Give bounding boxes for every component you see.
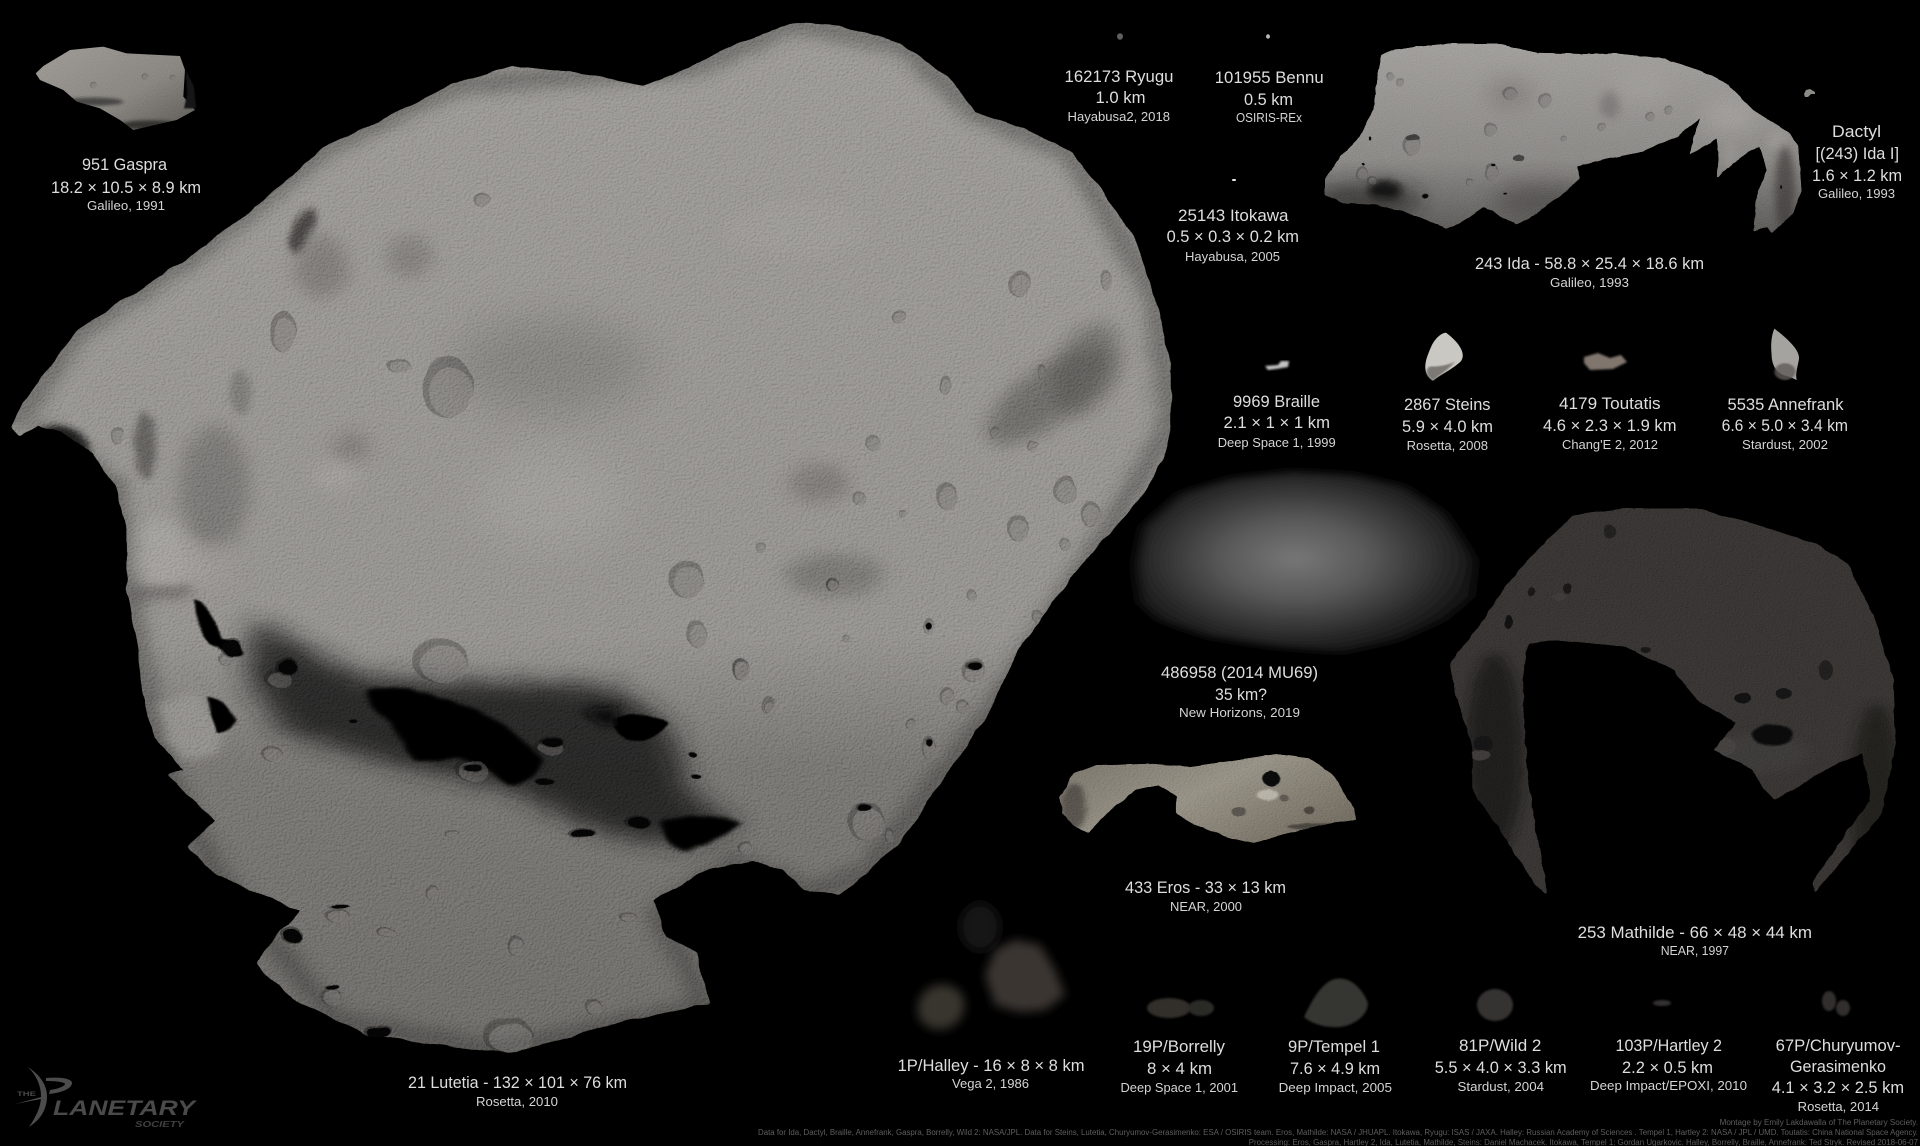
logo: The Planetary Society: THE	[17, 1092, 36, 1098]
caption: 9969 Braille: 2.1 × 1 × 1 km	[1224, 413, 1330, 432]
credits: Data for Ida, Dactyl, Braille, Annefrank, Gaspra, Borrelly, Wild 2: NASA/JPL. Data for Steins, Lutetia, Churyumov-Gerasimenko: ESA / OSIRIS team. Eros, Mathilde: NASA / JHUAPL. Itokawa, Ryugu: ISAS / JAXA. Halley: Russian Academy of Sciences . Tempel 1, Hartley 2: NASA / JPL / UMD. Toutatis: China National Space Agency.	[758, 1128, 1918, 1137]
caption: 4179 Toutatis: Chang'E 2, 2012	[1562, 437, 1658, 452]
caption: 101955 Bennu	[1215, 68, 1324, 125]
caption: 433 Eros: NEAR, 2000	[1170, 899, 1242, 914]
caption: Dactyl: [(243) Ida I]	[1816, 144, 1899, 163]
caption: 5535 Annefrank	[1722, 395, 1848, 452]
caption: 162173 Ryugu	[1064, 67, 1174, 124]
asteroid: 4179 Toutatis	[1584, 353, 1627, 370]
caption: 101955 Bennu: 0.5 km	[1244, 90, 1293, 109]
logo: The Planetary Society: LANETARY	[53, 1097, 198, 1120]
caption: 19P/Borrelly: 8 × 4 km	[1147, 1059, 1212, 1078]
lower craters	[218, 561, 893, 1053]
caption: 951 Gaspra	[51, 155, 201, 213]
upper crater field	[112, 193, 1111, 758]
asteroid: 486958 (2014 MU69)	[1137, 472, 1475, 653]
caption: 25143 Itokawa: 0.5 × 0.3 × 0.2 km	[1167, 227, 1299, 246]
caption: 101955 Bennu: 101955 Bennu	[1215, 68, 1324, 87]
caption: 162173 Ryugu: 1.0 km	[1096, 88, 1146, 107]
caption: 67P/Churyumov-Gerasimenko: 4.1 × 3.2 × 2.5 km	[1772, 1078, 1904, 1097]
caption: Dactyl: Galileo, 1993	[1818, 186, 1895, 201]
caption: 2867 Steins	[1402, 395, 1493, 453]
caption: 2867 Steins: Rosetta, 2008	[1407, 438, 1488, 453]
caption: 9969 Braille: Deep Space 1, 1999	[1218, 435, 1336, 450]
caption: 19P/Borrelly	[1120, 1037, 1238, 1095]
caption: 5535 Annefrank: 6.6 × 5.0 × 3.4 km	[1722, 416, 1848, 435]
caption: 21 Lutetia: 21 Lutetia - 132 × 101 × 76 km	[408, 1073, 627, 1092]
caption: 253 Mathilde: 253 Mathilde - 66 × 48 × 44 km	[1578, 923, 1812, 942]
caption: 1P/Halley	[898, 1056, 1085, 1091]
asteroid: 243 Ida	[1324, 43, 1802, 233]
caption: 486958 (2014 MU69): 486958 (2014 MU69)	[1161, 663, 1318, 682]
caption: 9P/Tempel 1: 9P/Tempel 1	[1288, 1037, 1380, 1056]
asteroid: 433 Eros	[1059, 754, 1356, 843]
shadow band with black pits	[131, 546, 893, 1053]
caption: 4179 Toutatis: 4.6 × 2.3 × 1.9 km	[1543, 416, 1676, 435]
caption: 253 Mathilde	[1578, 923, 1812, 958]
caption: 1P/Halley: 1P/Halley - 16 × 8 × 8 km	[898, 1056, 1085, 1075]
comet: 81P/Wild 2	[1477, 989, 1513, 1021]
caption: 25143 Itokawa: 25143 Itokawa	[1178, 206, 1289, 225]
caption: 162173 Ryugu: 162173 Ryugu	[1064, 67, 1174, 86]
caption: 81P/Wild 2: 81P/Wild 2	[1459, 1036, 1541, 1055]
caption: 19P/Borrelly: 19P/Borrelly	[1133, 1037, 1225, 1056]
caption: 486958 (2014 MU69): 35 km?	[1215, 685, 1267, 704]
caption: 81P/Wild 2: Stardust, 2004	[1458, 1079, 1544, 1094]
caption: 5535 Annefrank: Stardust, 2002	[1742, 437, 1828, 452]
caption: 81P/Wild 2: 5.5 × 4.0 × 3.3 km	[1435, 1058, 1567, 1077]
caption: 243 Ida: Galileo, 1993	[1550, 275, 1629, 290]
caption: 4179 Toutatis: 4179 Toutatis	[1559, 394, 1661, 413]
credits	[758, 1118, 1919, 1146]
caption: 243 Ida	[1475, 254, 1704, 290]
asteroid: 9969 Braille	[1265, 361, 1289, 370]
caption: 9P/Tempel 1: 7.6 × 4.9 km	[1290, 1059, 1380, 1078]
caption: 486958 (2014 MU69): New Horizons, 2019	[1179, 705, 1300, 720]
caption: 67P/Churyumov-Gerasimenko: Rosetta, 2014	[1798, 1099, 1879, 1114]
asteroid: 253 Mathilde	[1450, 508, 1896, 894]
caption: Dactyl: 1.6 × 1.2 km	[1812, 166, 1902, 185]
caption: 1P/Halley: Vega 2, 1986	[952, 1076, 1029, 1091]
asteroid: 21 Lutetia	[0, 0, 1200, 1060]
credits: Montage by Emily Lakdawalla of The Planetary Society.	[1720, 1118, 1918, 1127]
asteroid: 5535 Annefrank	[1771, 329, 1799, 380]
caption: 433 Eros: 433 Eros - 33 × 13 km	[1125, 878, 1286, 897]
asteroid: 162173 Ryugu	[1117, 33, 1123, 40]
caption: 4179 Toutatis	[1543, 394, 1676, 452]
comet: 103P/Hartley 2	[1653, 1000, 1671, 1006]
caption: 243 Ida: 243 Ida - 58.8 × 25.4 × 18.6 km	[1475, 254, 1704, 273]
caption: 9P/Tempel 1: Deep Impact, 2005	[1279, 1080, 1392, 1095]
caption: 951 Gaspra: Galileo, 1991	[87, 198, 165, 213]
caption: 103P/Hartley 2	[1590, 1036, 1747, 1093]
caption: 2867 Steins: 5.9 × 4.0 km	[1402, 417, 1493, 436]
caption: 103P/Hartley 2: Deep Impact/EPOXI, 2010	[1590, 1078, 1747, 1093]
caption: 2867 Steins: 2867 Steins	[1404, 395, 1490, 414]
caption: 9P/Tempel 1	[1279, 1037, 1392, 1095]
caption: 9969 Braille: 9969 Braille	[1233, 392, 1320, 411]
caption: 162173 Ryugu: Hayabusa2, 2018	[1068, 109, 1170, 124]
logo: The Planetary Society: SOCIETY	[135, 1120, 185, 1129]
caption: 103P/Hartley 2: 103P/Hartley 2	[1616, 1036, 1722, 1055]
comet: 19P/Borrelly	[1147, 998, 1214, 1018]
caption: 253 Mathilde: NEAR, 1997	[1661, 943, 1729, 958]
caption: 67P/Churyumov-Gerasimenko: Gerasimenko	[1790, 1057, 1886, 1076]
caption: 25143 Itokawa: Hayabusa, 2005	[1185, 249, 1280, 264]
caption: 21 Lutetia: Rosetta, 2010	[476, 1094, 558, 1109]
caption: 486958 (2014 MU69)	[1161, 663, 1318, 720]
caption: 19P/Borrelly: Deep Space 1, 2001	[1120, 1080, 1238, 1095]
asteroid: 101955 Bennu	[1266, 34, 1270, 39]
caption: 951 Gaspra: 951 Gaspra	[82, 155, 168, 174]
caption: 67P/Churyumov-Gerasimenko: 67P/Churyumov-	[1776, 1036, 1901, 1055]
caption: 25143 Itokawa	[1167, 206, 1299, 264]
logo: The Planetary Society	[15, 1067, 198, 1129]
caption: 101955 Bennu: OSIRIS-REx	[1236, 110, 1302, 125]
caption: 103P/Hartley 2: 2.2 × 0.5 km	[1622, 1058, 1713, 1077]
caption: 433 Eros	[1125, 878, 1286, 914]
asteroid: Dactyl	[1804, 89, 1815, 97]
comet: 67P/Churyumov-Gerasimenko	[1822, 991, 1850, 1016]
caption: 951 Gaspra: 18.2 × 10.5 × 8.9 km	[51, 178, 201, 197]
asteroid: 2867 Steins	[1425, 333, 1463, 381]
caption: 81P/Wild 2	[1435, 1036, 1567, 1094]
caption: 9969 Braille	[1218, 392, 1336, 450]
caption: 5535 Annefrank: 5535 Annefrank	[1728, 395, 1844, 414]
comet: 1P/Halley	[909, 903, 1065, 1038]
caption: 67P/Churyumov-Gerasimenko	[1772, 1036, 1904, 1114]
ida craters	[1356, 72, 1783, 199]
comet: 9P/Tempel 1	[1304, 979, 1368, 1027]
asteroid: 25143 Itokawa	[1232, 179, 1236, 181]
caption: Dactyl: Dactyl	[1832, 122, 1881, 141]
caption: 21 Lutetia	[408, 1073, 627, 1109]
asteroid: 951 Gaspra	[36, 46, 196, 130]
caption: Dactyl	[1812, 122, 1902, 201]
